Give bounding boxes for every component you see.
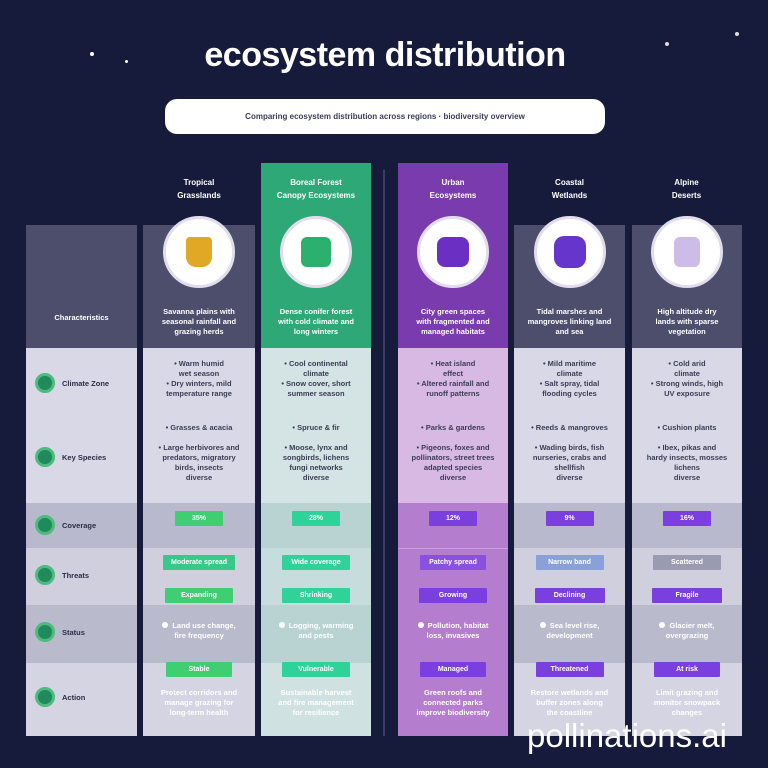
divider [383,170,385,736]
column: coastal wetlands: mangroves linking land [528,317,611,326]
column: highlighted purple: Pollution, habitat [428,621,488,630]
column: coastal wetlands: • Wading birds, fish [535,443,604,452]
column: coastal wetlands: flooding cycles [542,389,597,398]
column: alpine deserts: High altitude dry [657,307,717,316]
column: tropical grasslands: wet season [179,369,219,378]
icon: tropical [163,216,235,288]
column: coastal wetlands: Restore wetlands and [531,688,608,697]
column: alpine deserts: 16% [680,515,694,522]
column: highlighted purple [398,163,508,736]
column: tropical grasslands: • Dry winters, mild [166,379,232,388]
row label: climate: Climate Zone [62,379,109,388]
column: highlighted green: for resilience [293,708,339,717]
column: labels: Characteristics [54,313,109,322]
column: highlighted green: diverse [303,473,329,482]
column: alpine deserts: Glacier melt, [669,621,715,630]
icon: urban [417,216,489,288]
column: highlighted green: Wide coverage [291,559,341,566]
column: tropical grasslands: 35% [192,515,206,522]
column: alpine deserts: At risk [676,666,698,673]
column: highlighted green: long winters [294,327,338,336]
column: alpine deserts: • Strong winds, high [651,379,723,388]
column: highlighted green: Sustainable harvest [281,688,351,697]
column: coastal wetlands: Tidal marshes and [537,307,602,316]
row label: status: Status [62,628,85,637]
column: tropical grasslands [143,216,255,736]
title: ecosystem distribution [204,36,566,74]
column: coastal wetlands: nurseries, crabs and [533,453,606,462]
column: coastal wetlands: Narrow band [548,559,591,566]
column: alpine deserts [632,216,742,736]
column: tropical grasslands: predators, migratory [162,453,236,462]
column: coastal wetlands: and sea [556,327,583,336]
row label: threats [35,565,89,585]
subtitle pill: Comparing ecosystem distribution across regions · biodiversity overview [245,112,525,121]
column: coastal wetlands [514,216,625,736]
text: Alpine [674,178,699,187]
column: highlighted green: Vulnerable [298,666,334,673]
column: highlighted purple: 12% [446,515,460,522]
column: highlighted green: • Spruce & fir [292,423,340,432]
column: labels [26,225,137,736]
column: highlighted green: with cold climate and [278,317,354,326]
row label: species: Key Species [62,453,106,462]
column: coastal wetlands: buffer zones along [536,698,603,707]
subtitle pill [165,99,605,134]
row label: climate [35,373,109,393]
column: coastal wetlands: Sea level rise, [550,621,599,630]
column: highlighted green: Boreal Forest [290,178,342,187]
column: alpine deserts: changes [672,708,702,717]
column: highlighted purple: Green roofs and [424,688,482,697]
text: Deserts [672,191,701,200]
column: coastal wetlands: • Salt spray, tidal [540,379,599,388]
column: highlighted purple: • Heat island [431,359,475,368]
column: tropical grasslands: Stable [188,666,210,673]
column: coastal wetlands: 9% [564,515,575,522]
column: highlighted purple: managed habitats [421,327,485,336]
column: highlighted green: • Moose, lynx and [284,443,348,452]
column: highlighted green: Dense conifer forest [280,307,352,316]
column: alpine deserts: • Ibex, pikas and [658,443,716,452]
column: highlighted green [261,163,371,736]
column: highlighted purple: runoff patterns [426,389,480,398]
column: alpine deserts: • Cushion plants [658,423,716,432]
column: tropical grasslands: Expanding [181,592,217,599]
column: alpine deserts: lichens [674,463,700,472]
column: coastal wetlands: the coastline [547,708,592,717]
column: highlighted green: Logging, warming [289,621,353,630]
column: highlighted purple: with fragmented and [416,317,490,326]
column: tropical grasslands: Land use change, [172,621,236,630]
row label: action: Action [62,693,85,702]
column: highlighted purple: Growing [439,592,467,599]
column: highlighted green: fungi networks [289,463,343,472]
watermark: pollinations.ai [527,717,727,754]
column: highlighted purple: City green spaces [421,307,485,316]
column: tropical grasslands: seasonal rainfall and [162,317,236,326]
column: tropical grasslands: birds, insects [175,463,223,472]
icon: wetlands [534,216,606,288]
column: tropical grasslands: • Warm humid [174,359,224,368]
column: highlighted purple: loss, invasives [427,631,479,640]
column: coastal wetlands: • Reeds & mangroves [531,423,608,432]
icon: alpine [651,216,723,288]
column: highlighted green: Canopy Ecosystems [277,191,355,200]
row label: status [35,622,85,642]
column: alpine deserts: • Cold arid [668,359,706,368]
column: coastal wetlands: development [546,631,593,640]
column: highlighted green: and fire management [278,698,354,707]
column: highlighted green: Shrinking [300,592,332,599]
column: alpine deserts: Limit grazing and [656,688,718,697]
column: alpine deserts: diverse [674,473,700,482]
column: tropical grasslands: • Grasses & acacia [166,423,232,432]
text: Coastal [555,178,584,187]
column: highlighted green: summer season [287,389,345,398]
column: coastal wetlands: • Mild maritime [543,359,596,368]
column: tropical grasslands: manage grazing for [164,698,234,707]
column: highlighted purple: improve biodiversity [416,708,490,717]
column: alpine deserts: lands with sparse [656,317,718,326]
column: tropical grasslands: Savanna plains with [163,307,235,316]
column: tropical grasslands: grazing herds [174,327,224,336]
row label: species [35,447,106,467]
column: tropical grasslands: Moderate spread [171,559,227,566]
column: alpine deserts: climate [674,369,700,378]
column: alpine deserts: overgrazing [666,631,708,640]
column: coastal wetlands: Threatened [551,666,588,673]
column: tropical grasslands: Protect corridors and [161,688,237,697]
column: highlighted green: • Snow cover, short [281,379,351,388]
column: alpine deserts: Fragile [676,592,698,599]
column: tropical grasslands: long-term health [170,708,228,717]
column: coastal wetlands: Declining [554,592,585,599]
row label: area: Coverage [62,521,96,530]
column: alpine deserts: monitor snowpack [654,698,720,707]
column: highlighted purple: connected parks [423,698,483,707]
column: highlighted green: and pests [298,631,334,640]
column: highlighted purple: pollinators, street trees [412,453,494,462]
column: highlighted purple: Managed [438,666,468,673]
column headers (outside) [177,178,221,200]
column: highlighted purple: • Pigeons, foxes and [416,443,490,452]
column: alpine deserts: hardy insects, mosses [647,453,727,462]
row label: action [35,687,85,707]
column: highlighted purple: Urban [441,178,465,187]
column: highlighted purple: adapted species [424,463,482,472]
column headers (outside): Tropical [184,178,214,187]
column: alpine deserts: UV exposure [664,389,710,398]
decorative stars [90,52,94,56]
column: highlighted purple: • Parks & gardens [421,423,485,432]
column: tropical grasslands: temperature range [166,389,232,398]
column: alpine deserts: vegetation [668,327,706,336]
column: highlighted purple: • Altered rainfall and [417,379,489,388]
row label: area [35,515,96,535]
column: highlighted purple: Patchy spread [429,559,477,566]
column: highlighted purple: diverse [440,473,466,482]
column: highlighted purple: effect [443,369,463,378]
text: Wetlands [552,191,587,200]
column: highlighted purple: Ecosystems [430,191,476,200]
column: highlighted green: 28% [309,515,323,522]
row label: threats: Threats [62,571,89,580]
column: highlighted green: • Cool continental [284,359,348,368]
column headers (outside): Grasslands [177,191,221,200]
column: highlighted green: songbirds, lichens [283,453,349,462]
column: tropical grasslands: fire frequency [174,631,224,640]
column: tropical grasslands: • Large herbivores and [158,443,239,452]
column: coastal wetlands: shellfish [554,463,585,472]
column: tropical grasslands: diverse [186,473,212,482]
column: coastal wetlands: diverse [556,473,583,482]
column: coastal wetlands: climate [557,369,582,378]
column: alpine deserts: Scattered [671,559,703,566]
column: highlighted green: climate [303,369,329,378]
icon: forest [280,216,352,288]
